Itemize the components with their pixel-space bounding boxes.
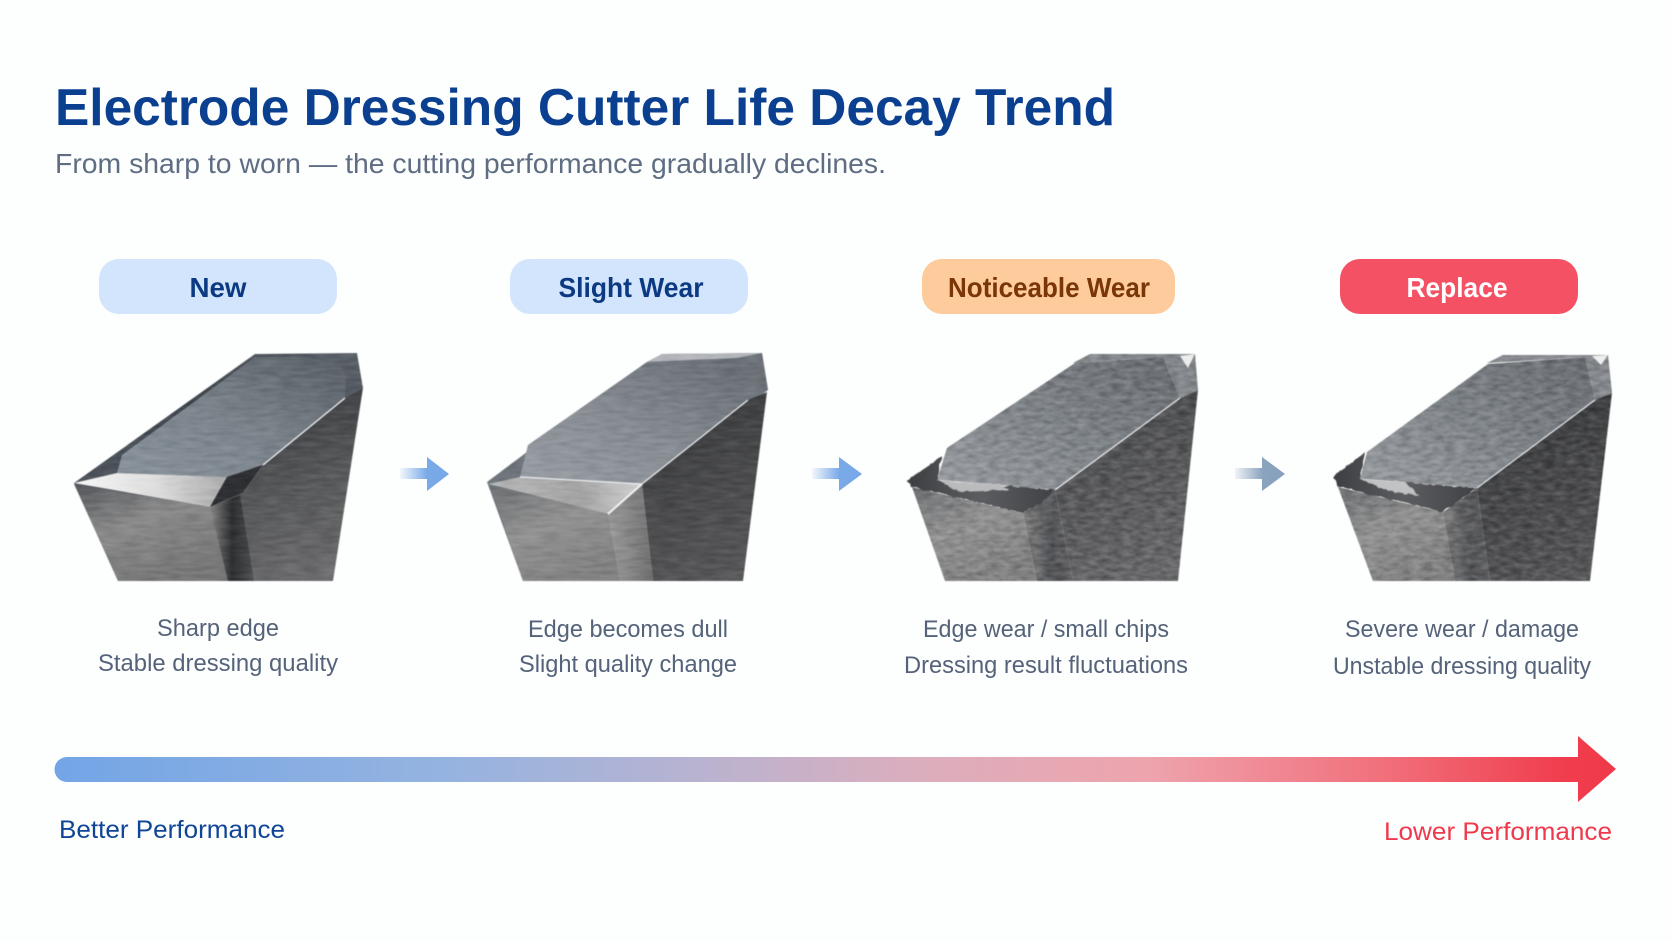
status pill: Slight Wear xyxy=(510,259,748,314)
cutter photo: slight wear xyxy=(487,353,768,581)
status pill: Noticeable Wear xyxy=(922,259,1175,314)
status pill: Replace: Replace xyxy=(1406,272,1508,303)
status pill: Replace xyxy=(1340,259,1578,314)
cutter photo: new, sharp edge xyxy=(74,353,363,581)
description: New xyxy=(98,615,338,677)
description: Slight Wear xyxy=(519,616,737,678)
description: New: Stable dressing quality xyxy=(98,650,338,677)
cutter photo: severe wear xyxy=(1338,355,1612,581)
description: Slight Wear: Edge becomes dull xyxy=(528,616,728,643)
status pill: Slight Wear: Slight Wear xyxy=(558,272,704,303)
chipped cutting edge xyxy=(907,456,1055,513)
status pill: New: New xyxy=(190,272,247,303)
cutter photo: noticeable wear with chips xyxy=(912,354,1198,581)
description: Noticeable Wear: Edge wear / small chips xyxy=(923,616,1169,643)
description: Slight Wear: Slight quality change xyxy=(519,651,737,678)
chipped and damaged edge xyxy=(1333,452,1477,512)
performance gradient arrow xyxy=(54,736,1616,802)
stage: Slight Wear xyxy=(487,259,768,678)
description: Noticeable Wear xyxy=(904,616,1188,679)
description: New: Sharp edge xyxy=(157,615,279,642)
description: Replace: Severe wear / damage xyxy=(1345,616,1579,643)
stage: Noticeable Wear xyxy=(904,259,1198,679)
label: lower performance: Lower Performance xyxy=(1384,818,1612,846)
stage: New xyxy=(74,259,363,677)
status pill: Noticeable Wear: Noticeable Wear xyxy=(948,272,1150,303)
label: better performance: Better Performance xyxy=(59,816,285,844)
arrow: Slight Wear to Noticeable Wear xyxy=(812,457,862,491)
description: Noticeable Wear: Dressing result fluctuations xyxy=(904,652,1188,679)
description: Replace xyxy=(1333,616,1591,680)
arrow: Noticeable Wear to Replace xyxy=(1235,457,1285,491)
title: Electrode Dressing Cutter Life Decay Trend xyxy=(55,79,1115,137)
stage: Replace xyxy=(1333,259,1612,680)
status pill: New xyxy=(99,259,337,314)
description: Replace: Unstable dressing quality xyxy=(1333,653,1591,680)
subtitle: From sharp to worn — the cutting performance gradually declines. xyxy=(55,148,886,179)
arrow: New to Slight Wear xyxy=(400,457,449,491)
